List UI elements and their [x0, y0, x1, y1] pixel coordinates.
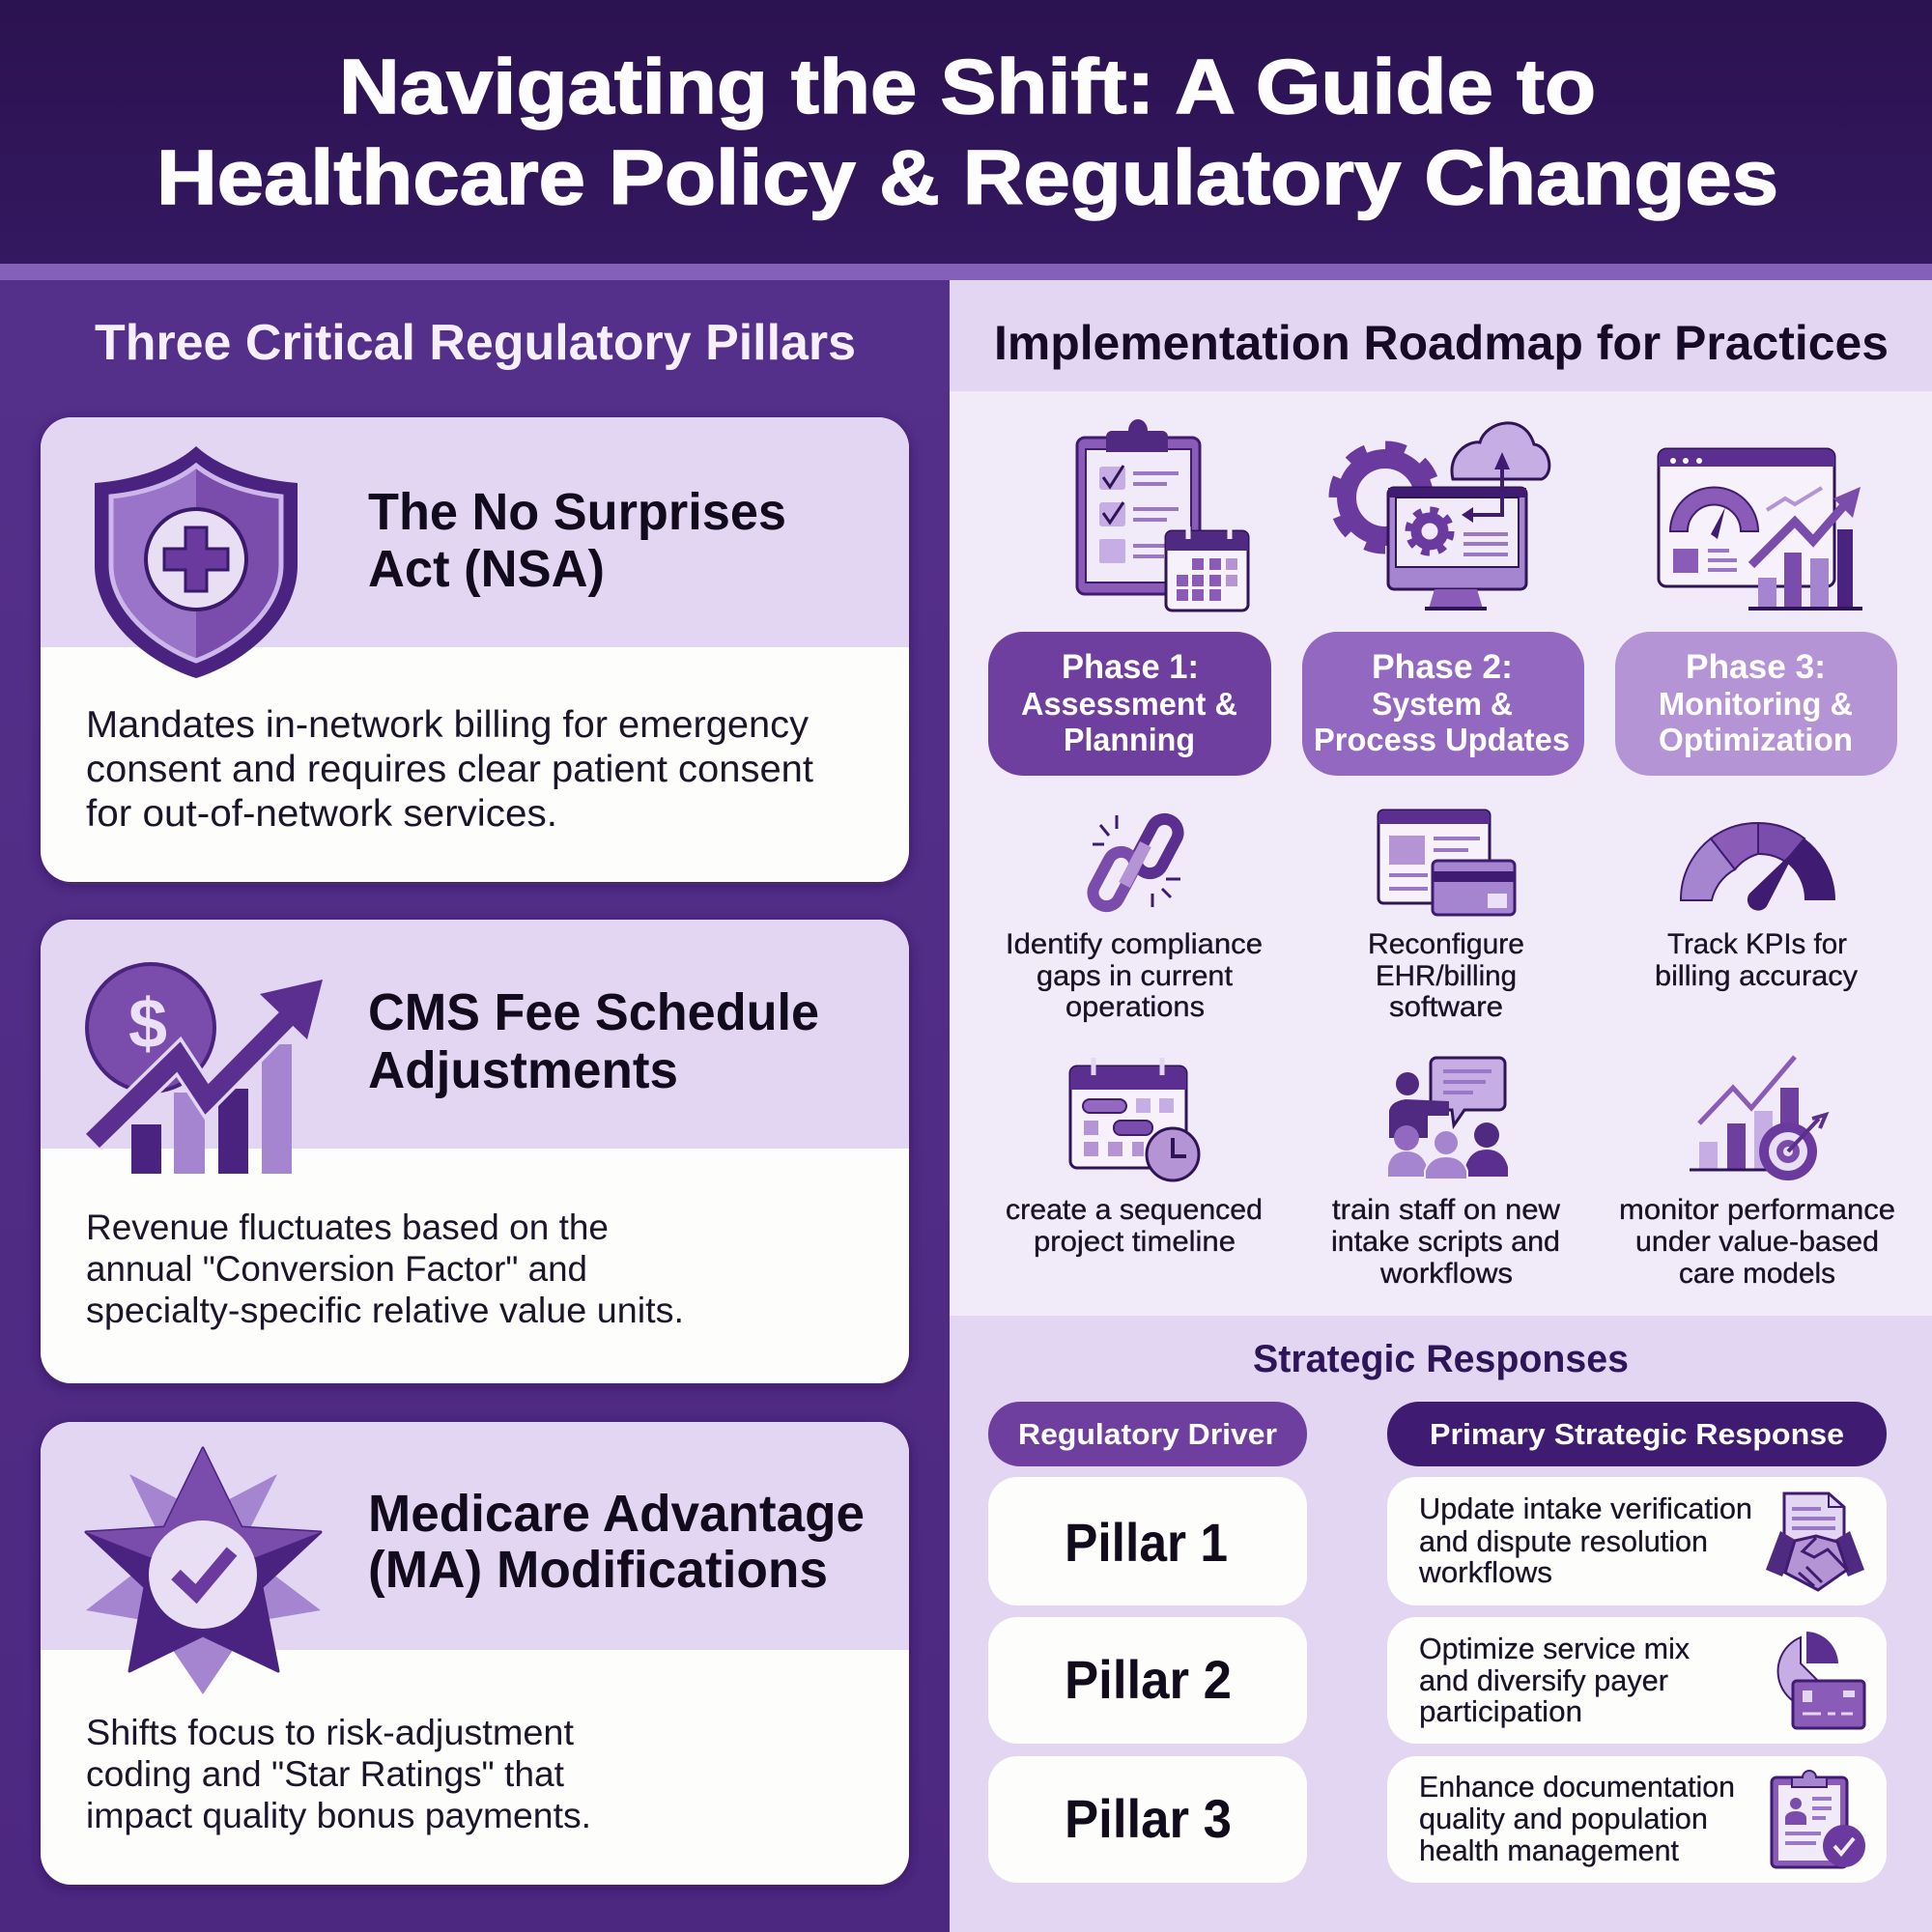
title: Navigating the Shift: A Guide to [339, 43, 1596, 129]
roadmap background [950, 280, 1932, 1316]
icon: broken chain link [1089, 814, 1182, 911]
row: pillar 2 response: and diversify payer [1419, 1663, 1668, 1697]
card body text: Mandates in-network billing for emergency [86, 704, 810, 746]
activity text: monitor performance: care models [1679, 1258, 1835, 1290]
heading: pillars: Three Critical Regulatory Pillars [95, 315, 856, 371]
activity text: monitor performance: under value-based [1635, 1226, 1879, 1258]
row: pillar 1 label [988, 1477, 1307, 1605]
title: Healthcare Policy & Regulatory Changes [156, 134, 1778, 220]
activity text: reconfigure: software [1389, 991, 1503, 1023]
activity text: identify compliance: operations [1065, 991, 1205, 1023]
activity text: train staff: workflows [1379, 1258, 1513, 1290]
icon: gauge meter [1681, 823, 1835, 911]
phase pill 2 [1302, 632, 1584, 776]
phase pill 2: Process Updates [1314, 722, 1570, 757]
phase pill 3: Monitoring & [1659, 686, 1853, 722]
phase pill 1: Assessment & [1021, 686, 1237, 722]
strategic background [950, 1316, 1932, 1932]
activity text: monitor performance: monitor performance [1619, 1194, 1895, 1226]
column header: primary strategic response: Primary Strategic Response [1430, 1417, 1844, 1451]
row: pillar 1 response [1387, 1477, 1887, 1605]
activity text: reconfigure [1368, 928, 1524, 1023]
row: pillar 2 response: participation [1419, 1694, 1582, 1728]
icon: star badge with check [86, 1448, 321, 1694]
card title: Act (NSA) [368, 540, 605, 598]
icon: clipboard with patient and check [1772, 1771, 1865, 1867]
icon: dollar coin and rising chart: $ [128, 985, 167, 1063]
activity text: reconfigure: Reconfigure [1368, 928, 1524, 960]
row: pillar 2 label: Pillar 2 [1065, 1649, 1232, 1710]
activity text: monitor performance [1619, 1194, 1895, 1290]
activity text: create timeline: project timeline [1034, 1226, 1236, 1258]
column header: regulatory driver: Regulatory Driver [1018, 1417, 1277, 1451]
row: pillar 1 label: Pillar 1 [1065, 1512, 1228, 1573]
activity text: identify compliance: gaps in current [1037, 960, 1234, 992]
phase pill 3 [1615, 632, 1897, 776]
card body text: coding and "Star Ratings" that [86, 1754, 565, 1794]
row: pillar 1 response: and dispute resolution [1419, 1524, 1708, 1558]
row: pillar 1 response: workflows [1418, 1555, 1552, 1589]
icon: pie chart and credit card [1778, 1632, 1864, 1728]
card body text [86, 704, 813, 835]
activity text: identify compliance: Identify compliance [1006, 928, 1263, 960]
card: cms fee schedule [41, 920, 909, 1383]
card title: (MA) Modifications [368, 1541, 828, 1599]
phase pill 1 [988, 632, 1271, 776]
card title [368, 483, 786, 598]
phase pill 2: Phase 2: [1372, 648, 1513, 686]
icon: document and handshake [1766, 1493, 1864, 1590]
icon: software window with payment card [1378, 810, 1515, 915]
card title: Medicare Advantage [368, 1485, 865, 1543]
activity text: reconfigure: EHR/billing [1376, 960, 1517, 992]
activity text: train staff: train staff on new [1332, 1194, 1560, 1226]
roadmap heading band [950, 280, 1932, 391]
card body text: annual "Conversion Factor" and [86, 1249, 587, 1289]
activity text: create timeline [1006, 1194, 1263, 1258]
card title: Adjustments [368, 1041, 678, 1099]
icon: shield with medical cross [95, 446, 298, 678]
row: pillar 3 response: Enhance documentation [1419, 1770, 1735, 1804]
header banner [0, 0, 1932, 280]
phase pill 1: Planning [1064, 722, 1195, 757]
icon: dollar coin and rising chart [87, 964, 323, 1174]
row: pillar 3 response: health management [1419, 1833, 1679, 1867]
card body text: impact quality bonus payments. [86, 1796, 591, 1835]
panel: regulatory pillars [0, 280, 950, 1932]
icon: chart with target [1690, 1057, 1826, 1180]
card title: CMS Fee Schedule [368, 983, 819, 1041]
activity text: train staff: intake scripts and [1331, 1226, 1560, 1258]
icon: timeline calendar with clock [1070, 1058, 1199, 1180]
card body text: for out-of-network services. [86, 793, 557, 835]
card title [368, 1485, 865, 1599]
phase pill 3: Phase 3: [1686, 648, 1826, 686]
title [156, 43, 1778, 220]
panel: strategic responses [950, 1316, 1932, 1932]
card title [368, 983, 819, 1099]
phase pill 1: Phase 1: [1062, 648, 1199, 686]
row: pillar 1 response: Update intake verification [1419, 1492, 1752, 1525]
row: pillar 2 response: Optimize service mix [1419, 1632, 1690, 1665]
row: pillar 3 response [1387, 1756, 1887, 1883]
panel: implementation roadmap [950, 280, 1932, 1316]
card body text [86, 1713, 591, 1835]
card: medicare advantage [41, 1422, 909, 1885]
heading: strategic responses: Strategic Responses [1253, 1338, 1629, 1380]
card body text: Shifts focus to risk-adjustment [86, 1713, 575, 1752]
row: pillar 3 label: Pillar 3 [1065, 1788, 1232, 1849]
phase pill 3: Optimization [1659, 722, 1853, 757]
card: no surprises act [41, 417, 909, 882]
card body text: consent and requires clear patient consent [86, 749, 813, 790]
phase pill 2: System & [1372, 686, 1513, 722]
row: pillar 3 label [988, 1756, 1307, 1883]
row: pillar 2 label [988, 1617, 1307, 1744]
icon: presenter and audience [1388, 1058, 1508, 1179]
activity text: train staff [1331, 1194, 1560, 1290]
card body text: specialty-specific relative value units. [86, 1291, 684, 1330]
column header: primary strategic response [1387, 1402, 1887, 1466]
activity text: track kpis: billing accuracy [1655, 960, 1858, 992]
icon: gear, monitor and cloud [1334, 423, 1549, 609]
card body text: Revenue fluctuates based on the [86, 1208, 609, 1247]
panel background [0, 280, 950, 1932]
row: pillar 3 response: quality and population [1419, 1802, 1708, 1835]
activity text: identify compliance [1006, 928, 1263, 1023]
card title: The No Surprises [368, 483, 786, 541]
row: pillar 2 response [1387, 1617, 1887, 1744]
column header: regulatory driver [988, 1402, 1307, 1466]
activity text: track kpis: Track KPIs for [1667, 928, 1847, 960]
roadmap heading band: Implementation Roadmap for Practices [994, 316, 1889, 370]
activity text: create timeline: create a sequenced [1006, 1194, 1263, 1226]
activity text: track kpis [1655, 928, 1858, 992]
icon: clipboard checklist with calendar [1077, 419, 1248, 611]
icon: dashboard with gauge and growth chart [1659, 449, 1862, 609]
card body text [86, 1208, 684, 1330]
